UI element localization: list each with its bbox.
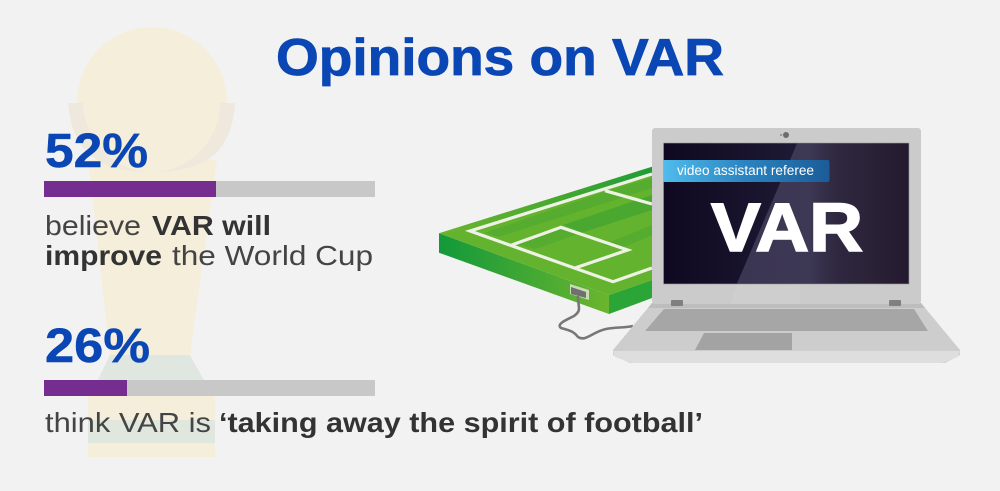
title: Opinions on VAR xyxy=(276,29,724,87)
VAR screen text: VAR xyxy=(711,189,863,266)
connector and cable xyxy=(560,284,633,338)
caption: improve: the World Cup xyxy=(172,240,373,271)
webcam xyxy=(780,132,789,138)
stat: 52 percent xyxy=(44,125,375,271)
progress bar: 26% xyxy=(44,380,375,396)
screen xyxy=(664,143,909,284)
caption: improve xyxy=(45,210,373,271)
caption: improve: believe xyxy=(45,210,141,241)
laptop base xyxy=(613,303,960,363)
lid reflection xyxy=(730,284,800,304)
progress bar: 52% xyxy=(44,181,375,197)
figure: 52%: 52% xyxy=(45,125,148,178)
banner xyxy=(664,160,830,182)
caption: improve: VAR will xyxy=(152,210,271,241)
banner: video assistant referee xyxy=(677,162,814,178)
screen reflection xyxy=(737,144,870,284)
caption: spirit of football xyxy=(45,407,703,438)
figure: 26%: 26% xyxy=(45,320,150,373)
caption: improve: improve xyxy=(45,240,162,271)
laptop lid xyxy=(652,128,921,304)
caption: spirit of football: think VAR is xyxy=(45,407,211,438)
laptop xyxy=(613,128,960,363)
football pitch xyxy=(439,167,652,338)
stat: 26 percent xyxy=(44,320,703,438)
hinges xyxy=(671,300,901,306)
trophy watermark xyxy=(68,27,235,457)
caption: spirit of football: ‘taking away the spirit of football’ xyxy=(219,407,703,438)
